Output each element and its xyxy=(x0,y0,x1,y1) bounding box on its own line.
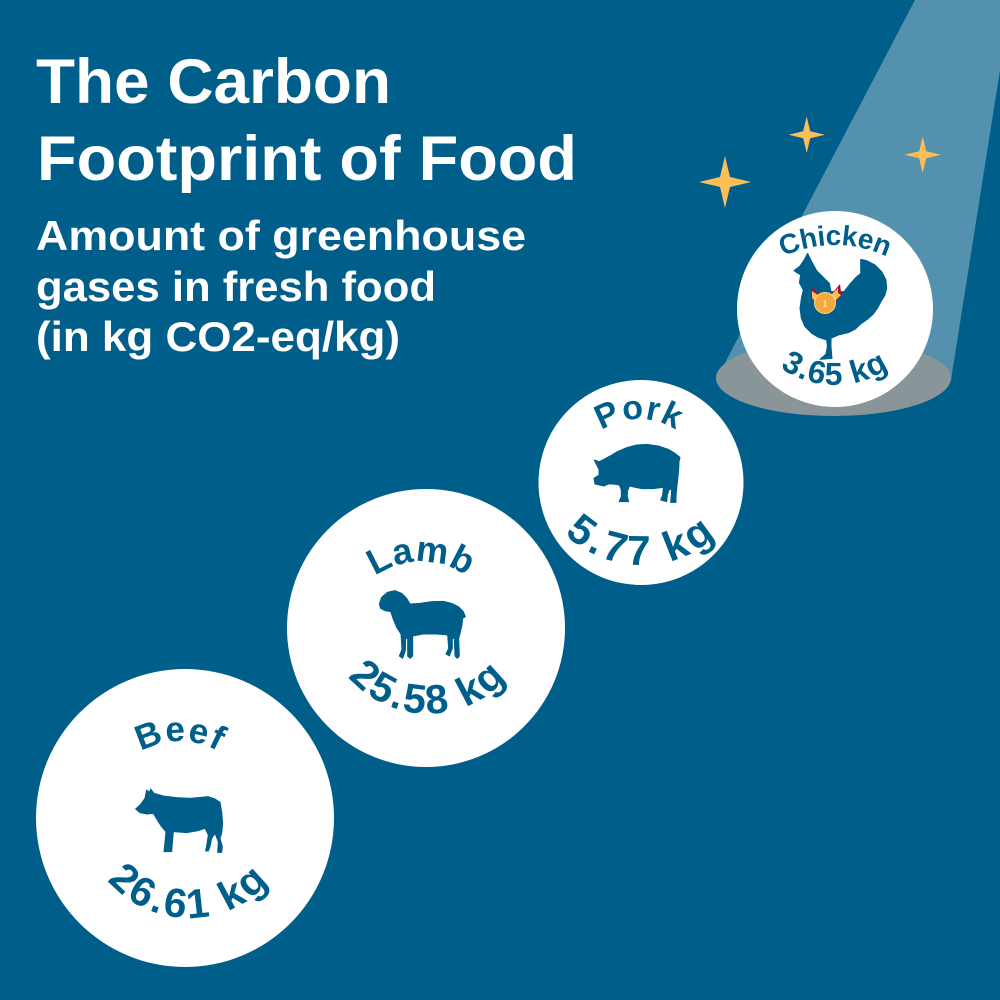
lamb label: Lamb xyxy=(366,542,472,574)
icon: chicken xyxy=(794,253,887,359)
icon: medal xyxy=(811,284,843,314)
subtitle: Amount of greenhouse xyxy=(36,212,526,259)
panel: pork xyxy=(538,380,744,585)
panel: beef xyxy=(36,669,334,967)
icon: sheep xyxy=(379,591,465,658)
star large xyxy=(699,156,751,208)
subtitle: gases in fresh food xyxy=(36,263,436,310)
panel: chicken xyxy=(737,211,933,407)
spotlight beam xyxy=(716,0,1000,380)
panel: lamb xyxy=(287,489,565,767)
title: Footprint of Food xyxy=(37,124,577,194)
chicken label: Chicken xyxy=(780,225,890,256)
icon: pig xyxy=(594,444,680,502)
subtitle xyxy=(36,212,526,360)
pork value: 5.77 kg xyxy=(568,513,716,565)
beef label: Beef xyxy=(134,722,229,750)
title: The Carbon xyxy=(36,47,391,117)
subtitle: (in kg CO2-eq/kg) xyxy=(36,313,400,360)
title xyxy=(36,47,577,194)
lamb value: 25.58 kg xyxy=(348,660,507,714)
icon: cow xyxy=(136,789,223,852)
beef value: 26.61 kg xyxy=(108,864,270,918)
star right xyxy=(904,136,941,173)
pork label: Pork xyxy=(594,400,684,430)
icon: medal: 1 xyxy=(822,298,828,310)
chicken value: 3.65 kg xyxy=(782,352,888,386)
spotlight floor ellipse xyxy=(716,340,951,416)
star middle xyxy=(788,116,825,153)
